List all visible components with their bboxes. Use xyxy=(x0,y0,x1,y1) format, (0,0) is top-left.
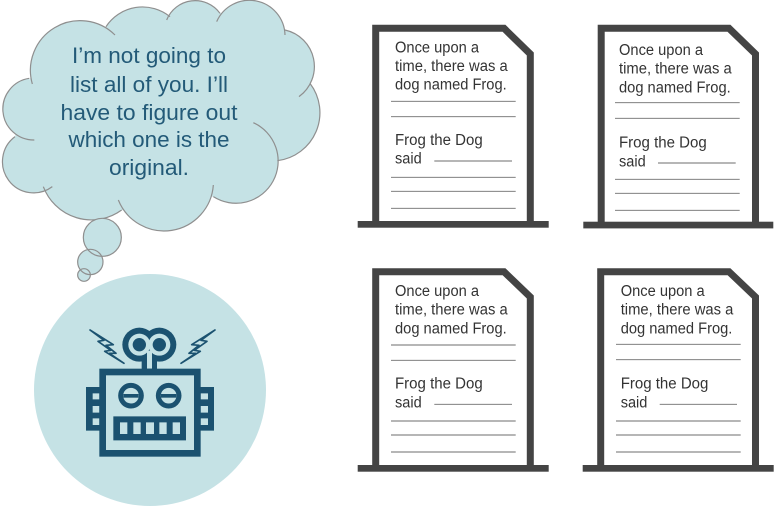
story text: Once upon a xyxy=(619,42,703,59)
story text: dog named Frog. xyxy=(619,79,731,96)
thought bubble xyxy=(2,0,320,281)
story text: said xyxy=(395,151,422,168)
icon: robot xyxy=(86,328,215,453)
document 3 xyxy=(358,272,549,472)
story text: time, there was a xyxy=(619,61,732,78)
icon: robot eyes xyxy=(121,385,179,406)
document 4 xyxy=(583,272,774,472)
bubble text xyxy=(60,43,238,180)
story text: said xyxy=(395,394,422,411)
robot circle xyxy=(34,274,266,506)
story text: Frog the Dog xyxy=(621,376,708,393)
bubble text: which one is the xyxy=(67,127,230,152)
bubble text: original. xyxy=(109,155,189,180)
icon: left lightning bolt xyxy=(90,330,124,363)
bubble text: I’m not going to xyxy=(72,43,226,68)
story text: time, there was a xyxy=(395,58,508,75)
bubble text: have to figure out xyxy=(60,100,238,125)
story text: time, there was a xyxy=(395,302,508,319)
story text xyxy=(621,283,734,411)
story text: dog named Frog. xyxy=(395,320,507,337)
document outline xyxy=(601,272,756,466)
icon: robot mouth xyxy=(113,416,186,440)
document 1 xyxy=(358,28,549,228)
document base xyxy=(358,221,549,228)
icon: right lightning bolt xyxy=(181,330,215,363)
story text xyxy=(395,39,508,168)
story text: Once upon a xyxy=(395,283,479,300)
story text: Frog the Dog xyxy=(395,376,483,393)
document base xyxy=(583,222,773,228)
icon: wind-up key xyxy=(122,328,176,370)
document outline xyxy=(376,272,530,466)
story text: Frog the Dog xyxy=(619,135,707,152)
document base xyxy=(583,465,774,472)
story text xyxy=(395,283,508,411)
document outline xyxy=(376,28,530,222)
story text: said xyxy=(619,153,646,170)
document base xyxy=(358,465,549,472)
cloud shape xyxy=(2,0,320,281)
story text: time, there was a xyxy=(621,302,734,319)
icon: robot head xyxy=(103,372,197,453)
story text xyxy=(619,42,732,170)
story text: Once upon a xyxy=(621,283,705,300)
story text: Frog the Dog xyxy=(395,132,483,149)
document 2 xyxy=(583,28,773,228)
story text: said xyxy=(621,394,647,411)
icon: robot ears xyxy=(86,387,214,431)
story text: Once upon a xyxy=(395,39,479,56)
story text: dog named Frog. xyxy=(621,320,732,337)
bubble text: list all of you. I’ll xyxy=(70,72,228,97)
document outline xyxy=(601,28,756,223)
story text: dog named Frog. xyxy=(395,77,507,94)
